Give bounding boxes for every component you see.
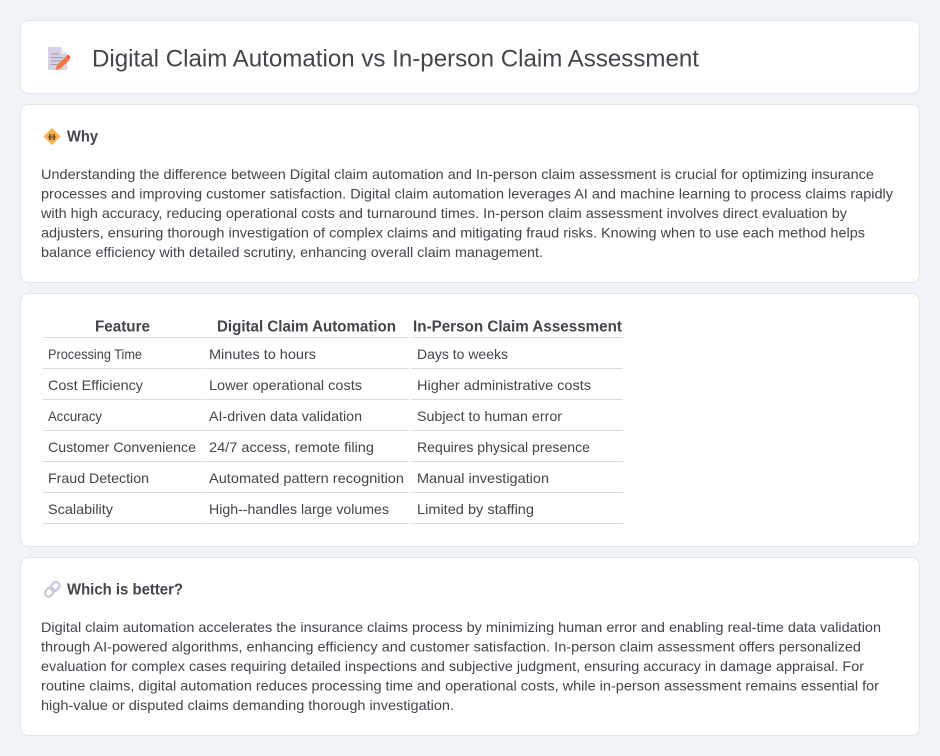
heading: which is better: Which is better?: [67, 582, 183, 598]
row: scalability: Scalability: [48, 501, 113, 517]
row: scalability: High--handles large volumes: [209, 501, 389, 517]
title: Digital Claim Automation vs In-person Claim Assessment: [92, 46, 699, 72]
icon: construction diamond: [44, 129, 60, 144]
panel: which is better: [20, 558, 920, 736]
panel: comparison table: [20, 294, 920, 546]
row: scalability: [48, 501, 534, 517]
icon: link: [44, 580, 61, 598]
row: accuracy: Accuracy: [48, 408, 102, 424]
text block: why paragraph: Understanding the difference between Digital claim automation and In-person claim assessment is crucial for optimizing insurance: [41, 166, 874, 182]
row: accuracy: AI-driven data validation: [209, 408, 362, 424]
table header: Feature: [95, 318, 150, 336]
table header: Digital Claim Automation: [217, 318, 396, 336]
text block: why paragraph: with high accuracy, reducing operational costs and turnaround times. In-person claim assessment involves direct evaluation by: [40, 205, 847, 221]
row: fraud detection: Fraud Detection: [48, 470, 149, 486]
table header: [95, 318, 623, 336]
text block: which paragraph: evaluation for complex cases requiring detailed inspections and subjective judgment, ensuring accuracy in damage appraisal. For: [41, 658, 864, 674]
row: processing time: Minutes to hours: [209, 346, 316, 362]
text block: which paragraph: through AI-powered algorithms, enhancing efficiency and customer satisfaction. In-person claim assessment offers personalized: [41, 638, 861, 654]
panel: title header: [20, 20, 920, 94]
row: cost efficiency: Lower operational costs: [209, 377, 362, 393]
row: cost efficiency: [48, 377, 591, 393]
row: fraud detection: [48, 470, 549, 486]
row: accuracy: Subject to human error: [417, 408, 562, 424]
row: customer convenience: Requires physical presence: [417, 439, 590, 455]
row: processing time: Processing Time: [48, 346, 142, 362]
text block: why paragraph: processes and improving customer satisfaction. Digital claim automation leverages AI and machine learning to process claims rapidly: [41, 186, 893, 202]
heading: why: Why: [67, 128, 98, 146]
row: accuracy: [48, 408, 562, 424]
panel: why: [20, 104, 920, 282]
text block: why paragraph: adjusters, ensuring thorough investigation of complex claims and mitigating fraud risks. Knowing when to use each method helps: [41, 224, 865, 240]
row: customer convenience: Customer Convenience: [48, 439, 196, 455]
text block: which paragraph: [41, 619, 881, 713]
row: cost efficiency: Higher administrative costs: [417, 377, 591, 393]
text block: which paragraph: Digital claim automation accelerates the insurance claims process by minimizing human error and enabling real-time data validation: [41, 619, 881, 635]
row: customer convenience: 24/7 access, remote filing: [209, 439, 374, 455]
row: cost efficiency: Cost Efficiency: [48, 377, 143, 393]
row: fraud detection: Automated pattern recognition: [209, 470, 404, 486]
text block: which paragraph: routine claims, digital automation reduces processing time and operational costs, while in-person assessment remains essential for: [41, 678, 879, 694]
row: processing time: [48, 346, 508, 362]
icon: document with pencil: [48, 47, 70, 70]
row: scalability: Limited by staffing: [417, 501, 534, 517]
text block: which paragraph: high-value or disputed claims demanding thorough investigation.: [41, 697, 454, 713]
row: processing time: Days to weeks: [417, 346, 508, 362]
row: customer convenience: [48, 439, 590, 455]
row: fraud detection: Manual investigation: [417, 470, 549, 486]
text block: why paragraph: balance efficiency with detailed scrutiny, enhancing overall claim management.: [41, 244, 543, 260]
text block: why paragraph: [40, 166, 893, 260]
table header: In-Person Claim Assessment: [413, 318, 623, 336]
